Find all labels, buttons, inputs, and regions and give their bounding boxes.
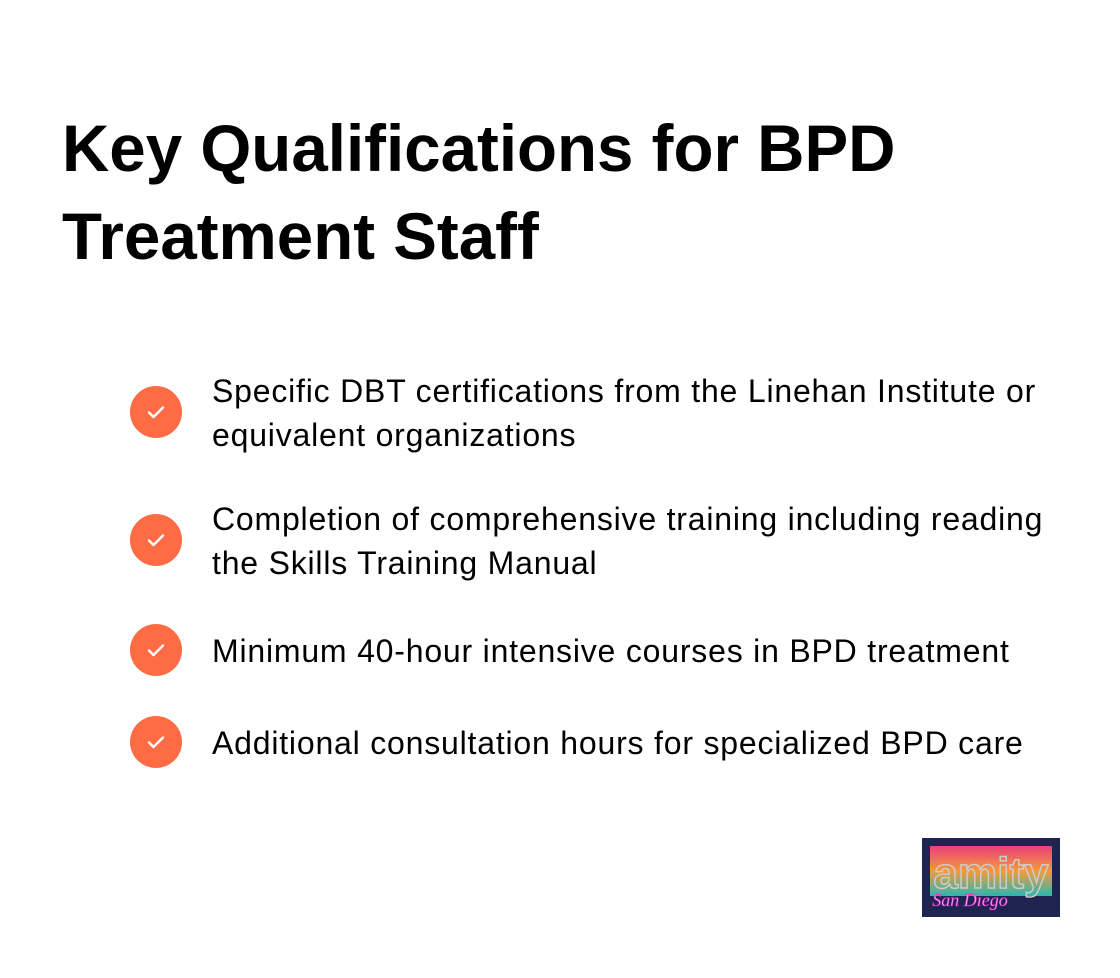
title: Key Qualifications for BPD <box>62 112 895 185</box>
logo <box>922 838 1060 917</box>
icon: check <box>130 624 182 676</box>
icon: check <box>130 514 182 566</box>
text: Specific DBT certifications from the Linehan Institute or <box>212 373 1036 409</box>
title <box>62 112 895 273</box>
text <box>212 373 1036 453</box>
text <box>212 501 1043 581</box>
item 4 <box>130 716 1024 768</box>
text: equivalent organizations <box>212 417 576 453</box>
logo: amity <box>934 849 1049 898</box>
item 3 <box>130 624 1010 676</box>
text: Additional consultation hours for specialized BPD care <box>212 725 1024 761</box>
icon: check <box>130 716 182 768</box>
icon: check <box>130 386 182 438</box>
title: Treatment Staff <box>62 200 539 273</box>
text: the Skills Training Manual <box>212 545 597 581</box>
item 2 <box>130 501 1043 581</box>
text: Completion of comprehensive training including reading <box>212 501 1043 537</box>
text: Minimum 40-hour intensive courses in BPD treatment <box>212 633 1010 669</box>
item 1 <box>130 373 1036 453</box>
logo: San Diego <box>932 890 1008 910</box>
